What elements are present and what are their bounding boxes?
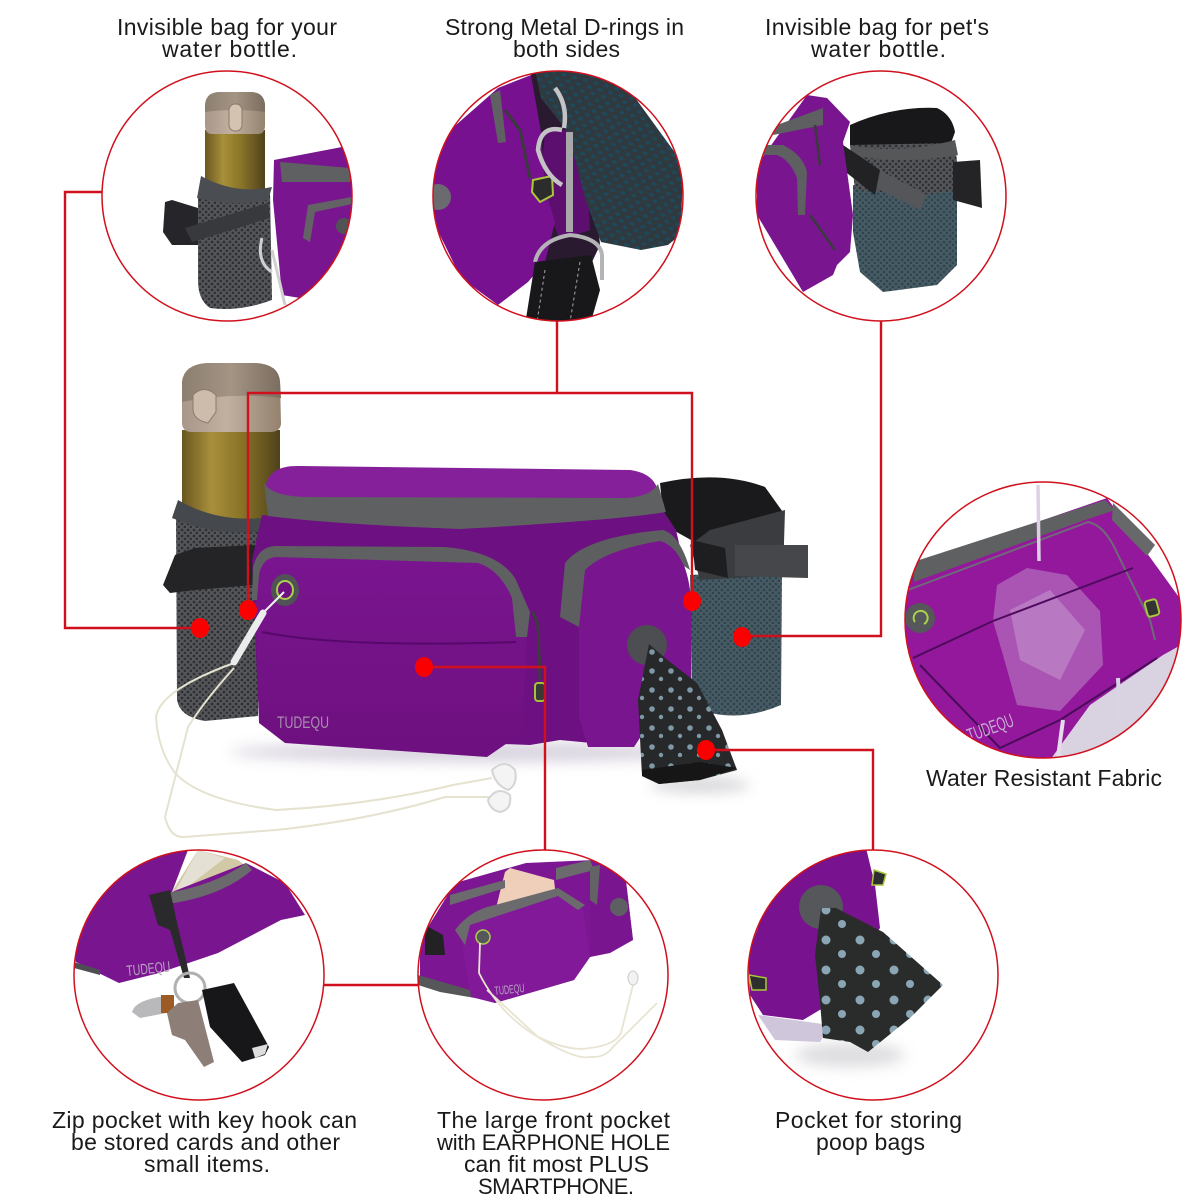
caption: zip pocket [52, 1107, 357, 1177]
circle: front pocket and phone [418, 860, 657, 1057]
caption: bottle pocket: Invisible bag for your [117, 14, 337, 40]
caption: poop bags: poop bags [816, 1129, 925, 1155]
caption: water resistant: Water Resistant Fabric [926, 765, 1162, 791]
caption: bottle pocket [117, 14, 337, 62]
side pocket [560, 530, 691, 747]
brand logo: TUDEQU [277, 713, 329, 732]
caption: front pocket: with EARPHONE HOLE [436, 1130, 670, 1155]
caption: zip pocket: small items. [144, 1151, 270, 1177]
caption: poop bags: Pocket for storing [775, 1107, 962, 1133]
poop bag [638, 644, 737, 784]
main product photo: waist bag [156, 363, 808, 837]
caption: poop bags [775, 1107, 962, 1155]
circle: pet bottle pocket [757, 95, 982, 292]
earphone hole [271, 574, 299, 606]
main zip band [264, 483, 666, 529]
circle: D-rings [425, 70, 684, 325]
caption: pet bottle [765, 14, 989, 62]
connector lines [65, 192, 881, 985]
bag body [252, 512, 692, 747]
top panel [266, 466, 657, 500]
bag hook disc [627, 625, 667, 665]
circle: front pocket and phone: TUDEQU [494, 981, 525, 998]
zipper pull [533, 612, 545, 701]
circle outlines [74, 71, 1181, 1100]
circle: water resistant fabric: TUDEQU [965, 711, 1017, 747]
circle: bottle pocket [163, 92, 352, 309]
caption: D-rings [445, 14, 684, 62]
water bottle [182, 363, 281, 525]
circle: zip pocket and keys [74, 850, 305, 1067]
caption: front pocket: The large front pocket [437, 1107, 671, 1133]
caption: bottle pocket: water bottle. [161, 36, 297, 62]
red marker dots [191, 591, 751, 760]
caption: D-rings: both sides [513, 36, 620, 62]
circle: water resistant fabric [905, 485, 1190, 765]
earphones [156, 592, 516, 837]
caption: front pocket [436, 1107, 671, 1199]
caption: front pocket: SMARTPHONE. [478, 1174, 634, 1199]
caption: pet bottle: water bottle. [810, 36, 946, 62]
caption: pet bottle: Invisible bag for pet's [765, 14, 989, 40]
caption: zip pocket: Zip pocket with key hook can [52, 1107, 357, 1133]
caption: front pocket: can fit most PLUS [464, 1151, 649, 1177]
circle: zip pocket and keys: TUDEQU [126, 958, 171, 980]
pet bottle and right mesh pocket [660, 477, 808, 716]
caption: D-rings: Strong Metal D-rings in [445, 14, 684, 40]
front pocket [252, 546, 530, 757]
circle: poop bag pocket [748, 848, 943, 1067]
caption: zip pocket: be stored cards and other [71, 1129, 340, 1155]
left mesh pocket [163, 500, 262, 721]
